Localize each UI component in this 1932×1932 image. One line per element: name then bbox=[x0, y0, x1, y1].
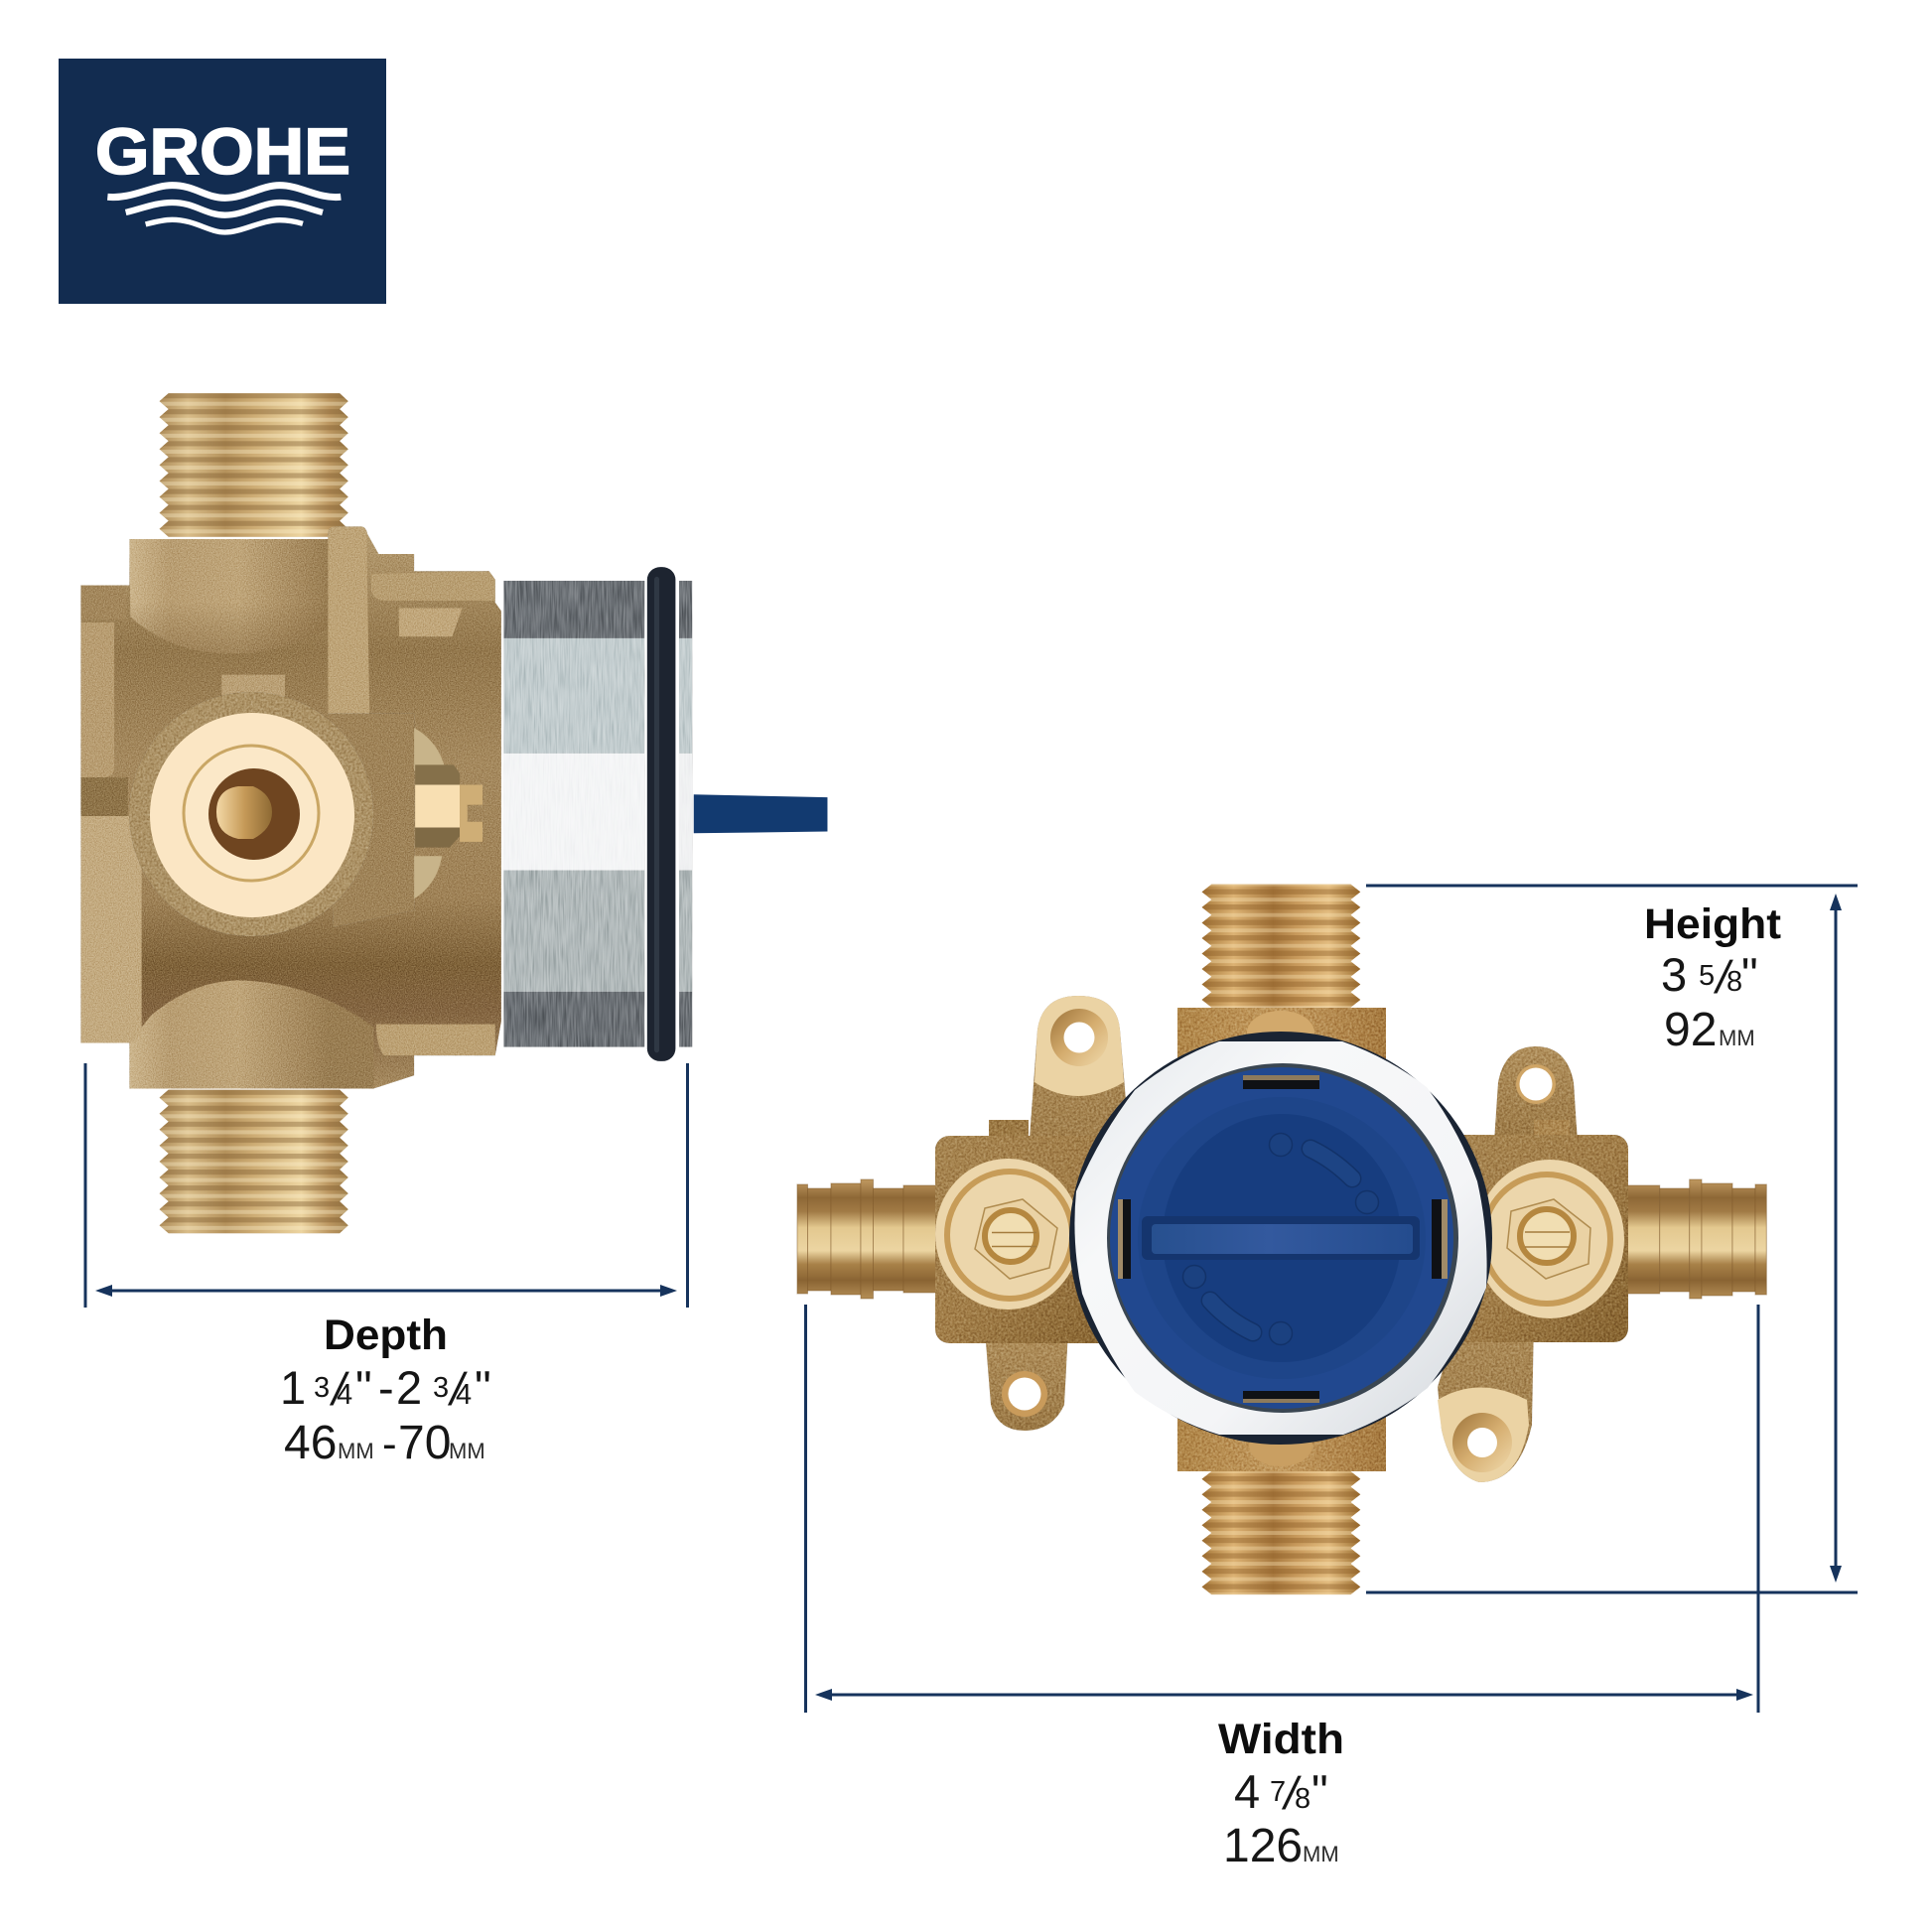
bottom threaded outlet bbox=[160, 1090, 348, 1233]
width label: " bbox=[1311, 1765, 1328, 1818]
width label: Width bbox=[1218, 1716, 1344, 1763]
depth label: 3 bbox=[433, 1372, 449, 1404]
mounting ear top right bbox=[1494, 1046, 1578, 1142]
mounting ear bottom right bbox=[1438, 1281, 1534, 1482]
height label: 5 bbox=[1699, 960, 1715, 992]
width label: 7 bbox=[1270, 1776, 1286, 1808]
mounting ear top left bbox=[989, 996, 1126, 1191]
depth label: 4 bbox=[337, 1379, 352, 1411]
depth label: 46 bbox=[284, 1417, 337, 1469]
GROHE logo bbox=[59, 59, 386, 304]
height label bbox=[1644, 900, 1781, 1056]
depth label: - bbox=[378, 1361, 394, 1414]
depth label: / bbox=[328, 1363, 351, 1415]
height label: MM bbox=[1719, 1026, 1755, 1050]
GROHE logo: GROHE bbox=[95, 114, 350, 188]
height label: 8 bbox=[1726, 966, 1742, 998]
blue plaster guard bbox=[1107, 1063, 1458, 1413]
height label: " bbox=[1741, 948, 1758, 1001]
width label: 126 bbox=[1223, 1820, 1303, 1872]
height label: 3 bbox=[1661, 948, 1687, 1001]
width label: MM bbox=[1303, 1842, 1339, 1866]
depth label: MM bbox=[338, 1439, 374, 1463]
depth label: " bbox=[355, 1361, 372, 1414]
left PEX inlet bbox=[797, 1179, 937, 1299]
port housing extension bbox=[328, 714, 414, 927]
depth label: 1 bbox=[280, 1361, 306, 1414]
depth label: MM bbox=[449, 1439, 485, 1463]
depth label: - bbox=[382, 1420, 397, 1468]
width label: 8 bbox=[1295, 1783, 1311, 1815]
depth label: " bbox=[475, 1361, 491, 1414]
black gasket bbox=[1069, 1032, 1492, 1445]
height label: / bbox=[1712, 951, 1735, 1003]
O-ring bbox=[647, 567, 675, 1061]
width dimension lines and arrow bbox=[806, 1305, 1758, 1713]
height label: 92 bbox=[1664, 1004, 1717, 1056]
front view of valve bbox=[797, 885, 1766, 1594]
width label bbox=[1218, 1716, 1344, 1872]
depth dimension lines and arrow bbox=[85, 1063, 687, 1308]
thin plate bbox=[679, 581, 692, 1047]
depth label bbox=[280, 1311, 491, 1469]
depth label: 2 bbox=[396, 1361, 422, 1414]
adjustment stem bbox=[414, 728, 483, 898]
height dimension lines and arrow bbox=[1366, 886, 1858, 1592]
depth label: 4 bbox=[456, 1379, 472, 1411]
threaded outlets bbox=[1202, 885, 1360, 1594]
central boss bbox=[1177, 1008, 1386, 1471]
width label: 4 bbox=[1234, 1765, 1260, 1818]
depth label: / bbox=[446, 1363, 470, 1415]
depth label: 3 bbox=[314, 1372, 330, 1404]
left valve body bbox=[935, 1136, 1124, 1343]
brass body bbox=[80, 526, 501, 1088]
side view of valve bbox=[80, 393, 827, 1233]
depth label: 70 bbox=[398, 1417, 451, 1469]
right valve body bbox=[1449, 1135, 1628, 1342]
side port bbox=[129, 692, 373, 936]
chrome octagonal ring bbox=[1074, 1041, 1487, 1435]
height label: Height bbox=[1644, 900, 1781, 948]
width label: / bbox=[1280, 1767, 1304, 1819]
mounting ear bottom left bbox=[985, 1330, 1068, 1431]
right PEX inlet bbox=[1626, 1179, 1766, 1299]
blue plaster guard tab bbox=[694, 794, 827, 833]
silver mounting nut bbox=[503, 581, 644, 1047]
depth label: Depth bbox=[324, 1311, 448, 1359]
top threaded outlet bbox=[160, 393, 348, 537]
